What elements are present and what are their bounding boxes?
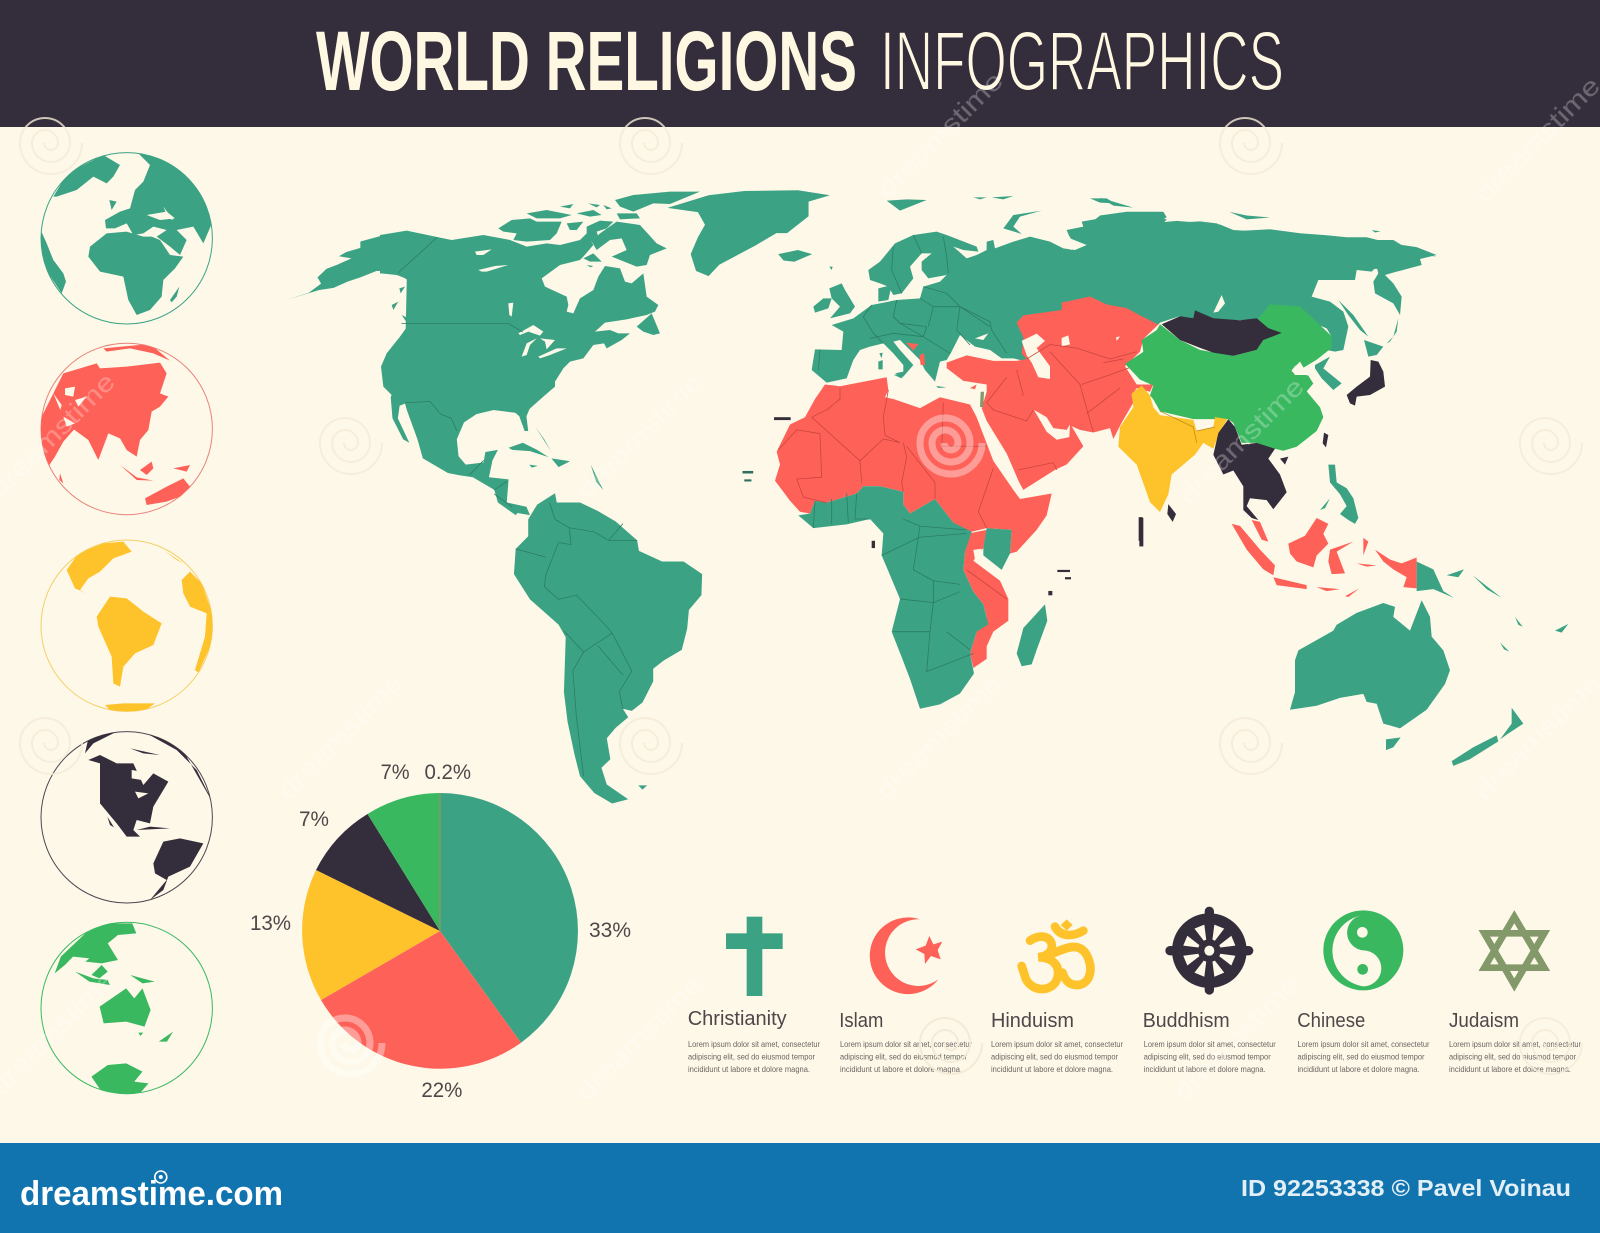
Persian Gulf, Caspian and Aral <box>1022 334 1135 440</box>
Americas borders <box>398 237 637 776</box>
diagonal watermark text: dreamstime <box>1167 968 1305 1106</box>
Red: North Africa <box>775 377 1052 554</box>
pie labels: 7% <box>381 761 410 784</box>
Japan <box>1347 360 1385 406</box>
religion label: Christianity: incididunt ut labore et dolore magna. <box>688 1065 810 1074</box>
diagonal watermark text: dreamstime <box>570 366 708 504</box>
Europe borders <box>818 235 1007 370</box>
religion label: Buddhism <box>1143 1010 1276 1074</box>
religion label: Buddhism: incididunt ut labore et dolore magna. <box>1144 1065 1266 1074</box>
religion label: Buddhism: Buddhism <box>1143 1010 1230 1032</box>
slice: Christianity 33% <box>440 793 578 1043</box>
pie labels: 7% <box>299 808 329 831</box>
religion label: Hinduism: Hinduism <box>991 1010 1074 1032</box>
Caribbean islands <box>509 427 603 490</box>
religion label: Judaism: Judaism <box>1449 1010 1519 1032</box>
small islands <box>774 417 1143 595</box>
religion label: Chinese: Chinese <box>1297 1010 1365 1032</box>
India <box>1118 385 1227 512</box>
religion label: Christianity <box>688 1008 820 1074</box>
Red: Middle East and Central Asia <box>947 297 1158 490</box>
diagonal watermark text: dreamstime <box>1172 371 1310 509</box>
religion label: Hinduism <box>991 1010 1123 1074</box>
globe: Africa and Europe (teal) <box>38 152 213 324</box>
Southeast Asia <box>1213 419 1287 520</box>
Azov and Ob gulf <box>975 232 1077 340</box>
religion label: Chinese: adipiscing elit, sed do eiusmod tempor <box>1298 1052 1425 1062</box>
map: Canada and United States <box>380 192 700 417</box>
religion label: Judaism: incididunt ut labore et dolore magna. <box>1449 1065 1571 1074</box>
Taiwan <box>1323 433 1328 447</box>
religion label: Chinese: Lorem ipsum dolor sit amet, consectetur <box>1298 1040 1430 1049</box>
Mongolia <box>1162 310 1282 356</box>
Tasmania and New Zealand <box>1386 708 1523 766</box>
icon: Chinese yin-yang <box>1323 910 1403 990</box>
Atlantic islets <box>742 471 753 481</box>
diagonal watermark text: dreamstime <box>570 968 708 1106</box>
slice: Hinduism 13% <box>302 870 440 1000</box>
religion label: Judaism: Lorem ipsum dolor sit amet, consectetur <box>1449 1040 1581 1049</box>
Indonesia <box>1232 518 1417 597</box>
China <box>1125 304 1332 451</box>
title: INFOGRAPHICS <box>880 14 1284 108</box>
Bohai Sea <box>1292 362 1313 375</box>
religion label: Judaism <box>1449 1010 1581 1074</box>
globe: South America (yellow) <box>41 540 213 713</box>
map: Siberia Arctic coast <box>1100 198 1437 269</box>
Denmark <box>878 285 892 302</box>
religion label: Christianity: Christianity <box>688 1008 787 1030</box>
UK and Ireland <box>813 283 855 318</box>
Lake Victoria <box>973 549 982 560</box>
diagonal watermark text: dreamstime <box>1468 667 1600 805</box>
pie labels: 0.2% <box>424 761 471 784</box>
religion label: Buddhism: adipiscing elit, sed do eiusmod tempor <box>1144 1052 1271 1062</box>
globe: North America (dark) <box>41 730 215 903</box>
pie labels: 33% <box>589 919 631 942</box>
religion label: Chinese: incididunt ut labore et dolore magna. <box>1298 1065 1420 1074</box>
religion label: Islam: Islam <box>839 1010 883 1032</box>
Madagascar <box>1017 604 1047 666</box>
Cyprus and Israel <box>970 384 984 407</box>
icon: Christian cross <box>726 917 783 996</box>
central Russia <box>1093 212 1260 352</box>
Sri Lanka, Hainan, Maldives <box>1139 457 1288 546</box>
religion label: Islam: adipiscing elit, sed do eiusmod tempor <box>840 1052 967 1062</box>
religion label: Hinduism: Lorem ipsum dolor sit amet, consectetur <box>991 1040 1123 1049</box>
South America <box>514 493 702 803</box>
diagonal watermark text: dreamstime <box>871 65 1009 203</box>
religion label: Islam: Lorem ipsum dolor sit amet, consectetur <box>840 1040 972 1049</box>
Sub-Saharan borders <box>813 494 973 672</box>
footer band <box>0 1143 1600 1233</box>
pie labels: 13% <box>250 912 291 935</box>
icon: Hindu Om <box>1022 919 1090 989</box>
map: Europe and western Russia <box>812 196 1120 388</box>
world map <box>287 190 1568 803</box>
slice: Chinese 7% <box>368 793 440 931</box>
religion label: Chinese <box>1297 1010 1430 1074</box>
icon: Islamic crescent and star <box>870 917 942 994</box>
Sakhalin and Hokkaido <box>1338 300 1398 357</box>
title: WORLD RELIGIONS <box>316 14 857 108</box>
footer image credit: ID 92253338 © Pavel Voinau <box>1241 1175 1571 1201</box>
religion label: Islam <box>839 1010 972 1074</box>
diagonal watermark text: dreamstime <box>1468 70 1600 208</box>
footer logo: dreamstime.com <box>20 1175 283 1213</box>
map: Russian Far East <box>1180 240 1437 352</box>
diagonal watermark text: dreamstime <box>869 667 1007 805</box>
religion label: Judaism: adipiscing elit, sed do eiusmod tempor <box>1449 1052 1576 1062</box>
slice: Buddhism 7% <box>316 814 440 931</box>
religion label: Hinduism: adipiscing elit, sed do eiusmod tempor <box>991 1052 1118 1062</box>
faint watermark spirals <box>20 118 1582 1074</box>
Greenland <box>667 190 830 276</box>
religion label: Christianity: adipiscing elit, sed do eiusmod tempor <box>688 1052 815 1062</box>
religion label: Christianity: Lorem ipsum dolor sit amet, consectetur <box>688 1040 820 1049</box>
Middle East and Africa red borders <box>778 344 1137 599</box>
mainland Europe and Scandinavia <box>812 213 1120 383</box>
header band <box>0 0 1600 127</box>
globe: Asia (red) <box>38 343 212 515</box>
Korea <box>1315 357 1342 390</box>
map: Northeast Asia coast <box>1292 300 1398 447</box>
Lake Baikal <box>1213 295 1225 313</box>
globe: Australia (green) <box>41 922 212 1095</box>
pie labels <box>250 761 631 1102</box>
pie chart <box>302 793 578 1069</box>
Green: Sub-Saharan Africa <box>798 486 988 709</box>
Bosnia and Albania <box>906 343 925 365</box>
religion label: Buddhism: Lorem ipsum dolor sit amet, consectetur <box>1144 1040 1276 1049</box>
diagonal watermark text: dreamstime <box>271 667 409 805</box>
map: Russia east, Africa and Middle East <box>774 212 1260 709</box>
Arctic and coastal islands <box>392 192 700 335</box>
religion label: Islam: incididunt ut labore et dolore magna. <box>840 1065 962 1074</box>
Philippines <box>1320 465 1358 524</box>
Red: East Africa <box>963 530 1008 668</box>
mainland Canada and USA <box>380 231 658 417</box>
icon: Buddhist dharma wheel <box>1170 911 1249 990</box>
Green: Kenya <box>983 528 1012 570</box>
Australia <box>1290 600 1450 728</box>
Papua New Guinea and Pacific islands <box>1417 561 1568 652</box>
map: Asia and Oceania <box>1118 304 1568 766</box>
slice: Judaism 0.2% <box>439 793 441 931</box>
faint spiral over Islam text <box>920 1018 982 1074</box>
slice: Islam 22% <box>321 931 521 1069</box>
strong watermark spirals over red <box>320 418 982 1074</box>
Alaska, Mexico and Central America <box>287 232 530 515</box>
religion label: Hinduism: incididunt ut labore et dolore magna. <box>991 1065 1113 1074</box>
icon: Star of David <box>1484 917 1544 985</box>
lakes <box>475 249 567 358</box>
map: Alaska, Mexico, Caribbean, South America, Greenland <box>287 190 830 803</box>
Arctic and Mediterranean islands <box>829 196 1115 388</box>
pie labels: 22% <box>421 1079 462 1102</box>
Iceland <box>778 250 812 262</box>
